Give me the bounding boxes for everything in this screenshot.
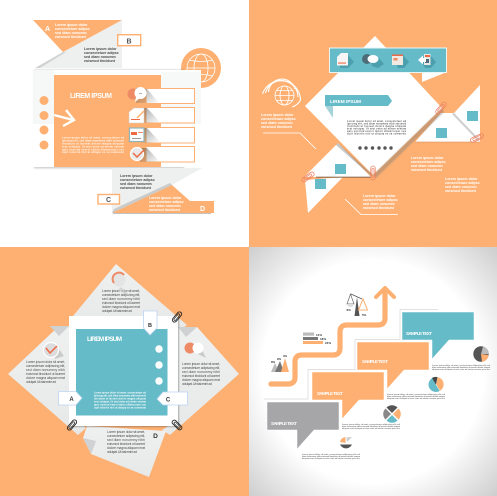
speech bubble: orange lower: SAMPLE TEXT	[317, 391, 343, 396]
text: left note: sed diam nonumm	[261, 121, 293, 125]
paper: left	[8, 326, 86, 435]
card body text: cipit lobortis nisl ut aliquip ex ea commodo	[62, 151, 124, 154]
paper: right: dolore magna aliquam erat	[182, 378, 220, 382]
text: far-right note: euismod tincidunt	[445, 189, 477, 193]
caption rows: Lorem ipsum dolor sit amet, consectetuer adipiscing elit sed	[342, 423, 401, 426]
paper: bottom with letter D: consectetuer adipiscing elit,	[107, 434, 145, 438]
paper: bottom with letter D: sed diam nonummy nibh	[107, 438, 145, 442]
step outlines	[264, 310, 438, 399]
pie: quarters	[383, 405, 401, 423]
mini triangle chart: 3%	[283, 354, 288, 358]
paper: top	[73, 264, 187, 330]
icon: note	[129, 108, 144, 123]
text: left note	[261, 113, 296, 129]
tag B	[144, 311, 157, 335]
text: centre-right note: euismod tincidunt	[411, 168, 443, 172]
icon: balance scale	[346, 294, 368, 317]
background: top-left panel	[0, 0, 250, 248]
folded footer C and D: consectetuer adipsc	[120, 178, 155, 182]
text: far-right note: Lorem ipsum dolor	[445, 177, 478, 181]
paper: left: Lorem ipsum dolor sit amet,	[26, 360, 65, 364]
paper: left: euismod tincidunt ut laoreet	[26, 372, 65, 376]
icon: globe with arcs	[262, 79, 300, 107]
paper: left: sed diam nonummy nibh	[26, 368, 65, 372]
caption rows: diam nonummy nibh euismod tincidunt ut laoreet dolore magna	[302, 455, 361, 458]
folded header A and B: consectetuer adipsc	[84, 51, 119, 55]
speech bubble: teal: SAMPLE TEXT	[406, 331, 432, 336]
caption rows: aliquam erat volutpat ut wisi enim ad minim veniam quis nos	[302, 457, 361, 460]
panel: top-left folded layout	[33, 20, 221, 214]
background: bottom-right panel	[249, 247, 497, 496]
paper: top: euismod tincidunt ut laoreet	[102, 301, 140, 305]
folded header A and B: B	[126, 38, 132, 46]
text: bottom note: sed diam nonumm	[363, 202, 395, 206]
paper: left: consectetuer adipiscing elit,	[26, 364, 65, 368]
card body text	[94, 392, 147, 410]
caption rows: diam nonummy nibh euismod tincidunt ut laoreet dolore magna	[432, 366, 491, 369]
pie: orange and dark	[340, 437, 352, 448]
text: centre-right note: sed diam nonumm	[411, 164, 443, 168]
mini triangle chart: 8%	[271, 360, 276, 364]
icon: note	[337, 53, 348, 66]
card heading: LIREM IPSUM	[87, 336, 122, 343]
card body text: tincidunt ut laoreet dolore magna aliquam	[62, 142, 125, 146]
caption rows: aliquam erat volutpat ut wisi enim ad minim veniam quis nos	[432, 368, 491, 371]
tag C	[157, 392, 188, 405]
folded header A and B: Lorem ipsum dolor	[55, 23, 88, 27]
card dots	[155, 345, 163, 385]
mini bar chart	[303, 332, 331, 345]
icon: refresh ring	[112, 273, 131, 297]
paper clips	[301, 101, 484, 183]
card body text: Lorem ipsum dolor sit amet, consectetuer ad	[94, 392, 147, 394]
icon: balance scale: 5%	[362, 313, 367, 317]
text: left note: Lorem ipsum dolor	[261, 113, 294, 117]
central card	[69, 316, 179, 427]
caption rows: Lorem ipsum dolor sit amet, consectetuer adipiscing elit sed	[387, 393, 446, 396]
text: far-right note: consectetuer adipsc	[445, 181, 480, 185]
card body text	[62, 136, 125, 154]
paper: top: volutpat. Ut wisi enim ad	[102, 309, 132, 313]
text: bottom note: consectetuer adipsc	[363, 198, 398, 202]
caption rows: Lorem ipsum dolor sit amet, consectetuer adipiscing elit sed	[302, 453, 361, 456]
icon: check badge	[130, 148, 144, 160]
caption rows: aliquam erat volutpat ut wisi enim ad minim veniam quis nos	[342, 427, 401, 430]
paper: bottom with letter D: Lorem ipsum dolor sit amet,	[107, 430, 145, 434]
body text	[347, 120, 407, 136]
panel: bottom-left envelope layout	[8, 264, 239, 477]
tag A: A	[69, 397, 74, 403]
paper: top: sed diam nonummy nibh	[102, 297, 140, 301]
folded header A and B	[33, 20, 141, 68]
tag B: B	[148, 323, 152, 329]
folded footer C and D: D	[200, 206, 205, 213]
paper: top: consectetuer adipiscing elit,	[102, 293, 140, 297]
mini triangle chart	[271, 354, 289, 372]
mini triangle chart: 9%	[277, 357, 282, 361]
speech bubble: teal	[402, 312, 474, 359]
caption rows: Lorem ipsum dolor sit amet, consectetuer adipiscing elit sed	[432, 364, 491, 367]
background: bottom-left panel	[0, 247, 249, 496]
icon: clipboard	[130, 128, 144, 142]
text: centre-right note	[411, 156, 446, 172]
icon: chat	[362, 54, 378, 64]
icon shadows	[340, 55, 436, 68]
body text: cipit lobortis nisl ut aliquip ex ea commodo	[347, 132, 407, 136]
paper: bottom with letter D	[83, 426, 166, 477]
body text: Lorem ipsum dolor sit amet, consectetuer ad	[347, 120, 407, 123]
title ribbon: LIREM IPSUM	[330, 99, 361, 105]
body text: quis nostrud exerci tation ullamcorper sus	[347, 130, 407, 133]
teal icon bar	[330, 48, 446, 72]
body text: ipiscing elit, sed diam nonummy nibh euismod	[347, 122, 407, 126]
text: centre-right note: consectetuer adipsc	[411, 160, 446, 164]
globe badge	[181, 48, 221, 88]
mini bar chart: 14%	[316, 333, 322, 337]
paper clips	[66, 311, 183, 431]
caption rows: diam nonummy nibh euismod tincidunt ut laoreet dolore magna	[342, 425, 401, 428]
folded footer C and D: Lorem ipsum dolor	[149, 196, 182, 200]
title ribbon	[325, 95, 392, 118]
paper: bottom with letter D: euismod tincidunt ut laoreet	[107, 442, 145, 446]
dot row	[358, 146, 393, 150]
mini bar chart: 18%	[320, 337, 326, 341]
speech bubble: gray: SAMPLE TEXT	[271, 421, 297, 426]
icon: arrow into list	[418, 54, 430, 65]
card body text: ipiscing elit, sed diam nonummy nibh euismod	[62, 140, 124, 142]
speech bubble: orange upper: SAMPLE TEXT	[362, 359, 388, 364]
folded header A and B: Lorem ipsum dolor	[84, 47, 117, 51]
arrow	[54, 110, 74, 126]
white origami shapes	[304, 36, 480, 213]
text: bottom note	[363, 194, 398, 210]
folded footer C and D: euismod tincidunt	[149, 208, 181, 212]
stair arrow	[271, 288, 394, 384]
folded header A and B: euismod tincidunt	[84, 59, 116, 63]
paper: left: volutpat. Ut wisi enim ad	[26, 380, 56, 384]
icon: clipboard	[392, 54, 403, 65]
folded header A and B: A	[45, 26, 50, 33]
text: left note: euismod tincidunt	[261, 125, 293, 129]
folded footer C and D	[98, 168, 214, 214]
speech bubble: gray	[267, 402, 339, 449]
leader line: left	[263, 133, 316, 149]
panel: top-right origami layout	[261, 36, 484, 214]
card body text: quis nostrud exerci tation ullamcorper sus	[94, 404, 147, 406]
text: centre-right note: Lorem ipsum dolor	[411, 156, 444, 160]
folded footer C and D: sed diam nonumm	[149, 204, 181, 208]
text: far-right note	[445, 177, 480, 193]
text: far-right note: sed diam nonumm	[445, 185, 477, 189]
tag A	[58, 392, 82, 405]
folded footer C and D: sed diam nonumm	[120, 182, 152, 186]
folded footer C and D: C	[106, 197, 111, 204]
card body text: erat volutpat. Ut wisi enim ad minim veniam	[62, 146, 125, 148]
body text: erat volutpat. Ut wisi enim ad minim veniam	[347, 128, 406, 130]
leader line: bottom	[345, 199, 398, 214]
text: bottom note: euismod tincidunt	[363, 206, 395, 210]
text: left note: consectetuer adipsc	[261, 117, 296, 121]
paper: bottom with letter D: volutpat. Ut wisi enim ad	[107, 450, 137, 454]
paper: left: dolore magna aliquam erat	[26, 376, 65, 380]
folded footer C and D: consectetuer adipsc	[149, 200, 184, 204]
paper: top: Lorem ipsum dolor sit amet,	[102, 289, 140, 293]
card body text: tincidunt ut laoreet dolore magna aliquam	[94, 398, 146, 400]
card body text: cipit lobortis nisl ut aliquip ex ea commodo	[94, 406, 147, 410]
caption rows: diam nonummy nibh euismod tincidunt ut laoreet dolore magna	[387, 395, 446, 398]
tag C: C	[166, 398, 171, 404]
icon: check badge	[44, 342, 64, 359]
card heading: LIREM IPSUM	[70, 93, 112, 100]
icon: balance scale: 6%	[346, 308, 351, 312]
row shadows	[136, 88, 160, 162]
main card	[33, 70, 201, 168]
panel: bottom-right staircase chart	[264, 288, 491, 460]
background: top-right panel	[249, 0, 497, 247]
folded footer C and D: Lorem ipsum dolor	[120, 174, 153, 178]
pie: teal and orange	[428, 377, 444, 392]
card body text: quis nostrud exerci tation ullamcorper sus	[62, 148, 125, 152]
body text: tincidunt ut laoreet dolore magna aliquam	[347, 125, 406, 128]
folded header A and B: euismod tincidunt	[55, 35, 87, 39]
card body text: ipiscing elit, sed diam nonummy nibh euismod	[94, 394, 147, 398]
paper: right: euismod tincidunt ut laoreet	[182, 374, 220, 378]
paper: bottom with letter D: D	[153, 433, 158, 440]
folded footer C and D: euismod tincidunt	[120, 186, 152, 190]
caption rows	[302, 364, 491, 460]
paper: top: dolore magna aliquam erat	[102, 305, 140, 309]
icon: chat bubble	[184, 342, 206, 358]
bullet dots	[40, 96, 48, 150]
folded header A and B: consectetuer adipsc	[55, 27, 90, 31]
paper: right	[162, 327, 239, 435]
text: bottom note: Lorem ipsum dolor	[363, 194, 396, 198]
paper: right: volutpat. Ut wisi enim ad	[182, 382, 212, 386]
paper: bottom with letter D: dolore magna aliquam erat	[107, 446, 145, 450]
card body text: erat volutpat. Ut wisi enim ad minim veniam	[94, 400, 146, 404]
mini bar chart: 24%	[325, 341, 331, 345]
folded header A and B: sed diam nonumm	[55, 31, 87, 35]
paper: right: consectetuer adipiscing elit,	[182, 366, 220, 370]
pie: dark gray and orange	[473, 346, 489, 362]
caption rows: aliquam erat volutpat ut wisi enim ad minim veniam quis nos	[387, 397, 446, 400]
teal squares	[315, 111, 478, 189]
paper: right: sed diam nonummy nibh	[182, 370, 220, 374]
speech bubble: orange lower	[312, 372, 384, 419]
folded header A and B: sed diam nonumm	[84, 55, 116, 59]
list rows	[146, 88, 194, 162]
speech bubble: orange upper	[357, 342, 429, 389]
icon: speech bubble: •••	[139, 92, 142, 96]
icon: speech bubble	[128, 87, 146, 102]
paper: right: Lorem ipsum dolor sit amet,	[182, 362, 220, 366]
card body text: Lorem ipsum dolor sit amet, consectetuer ad	[62, 136, 124, 140]
